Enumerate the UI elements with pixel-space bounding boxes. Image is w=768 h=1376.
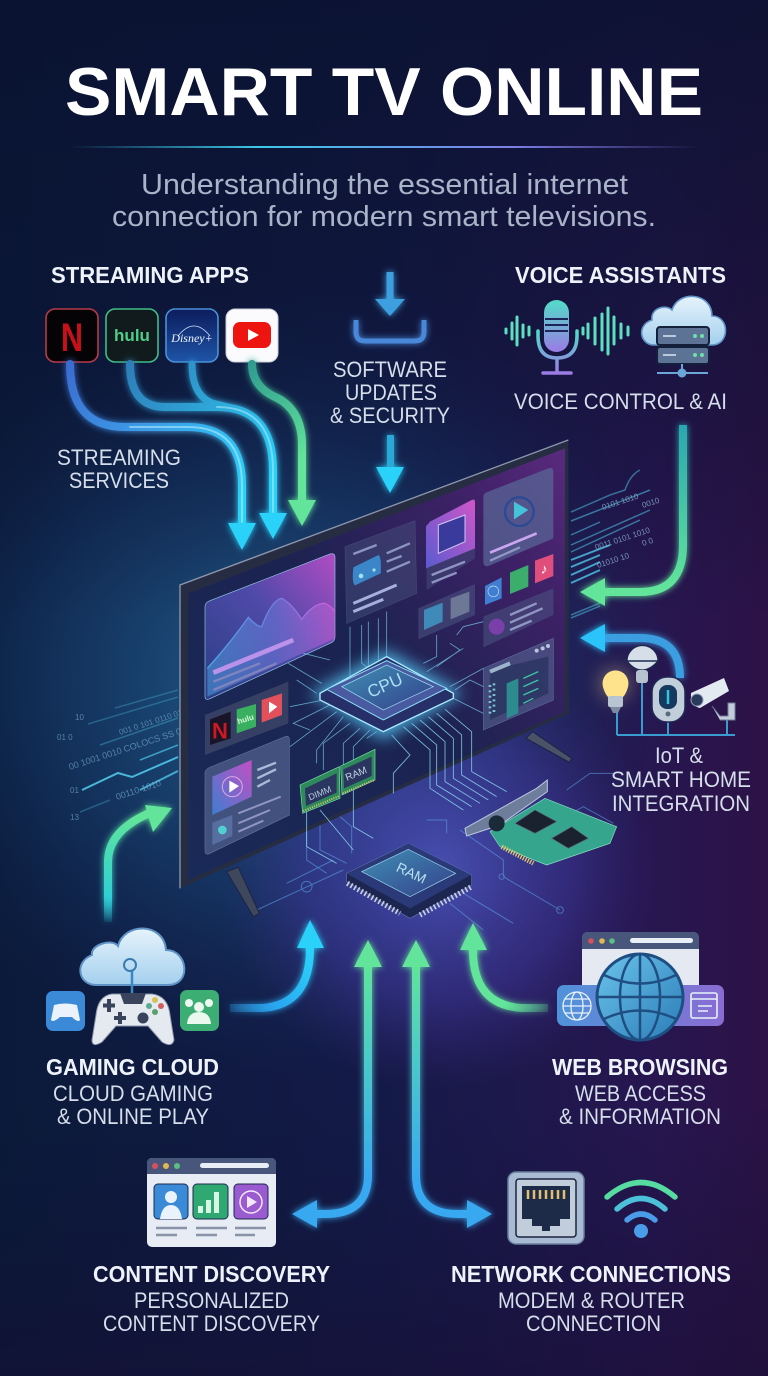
panel: info card	[345, 521, 417, 623]
panel: chart	[205, 554, 335, 699]
label: modem and router	[498, 1288, 685, 1336]
label: iot and smart home: SMART HOME	[611, 767, 751, 792]
label: personalized discovery: PERSONALIZED	[134, 1288, 289, 1313]
arrow: software	[376, 435, 404, 493]
label: web access: WEB ACCESS	[575, 1081, 706, 1106]
data streams: right: 0 0	[641, 536, 655, 548]
label: software updates and security	[330, 357, 450, 428]
icon: iot devices	[599, 646, 735, 735]
arrow: hulu and disney	[130, 364, 287, 539]
ram chip	[347, 843, 472, 918]
app tiles: ♪	[540, 560, 547, 576]
icon: ethernet port	[508, 1172, 584, 1244]
data streams: left: 00110 1010	[115, 778, 162, 802]
label: voice control and ai: VOICE CONTROL & AI	[514, 389, 727, 414]
panel: video card	[483, 468, 553, 566]
icon: hulu	[106, 309, 158, 362]
arrow: network connections	[402, 940, 492, 1228]
ram sticks: DIMM	[307, 784, 333, 802]
icon: content discovery window	[147, 1158, 276, 1247]
panel: profile	[483, 588, 553, 647]
heading: content discovery: CONTENT DISCOVERY	[93, 1261, 330, 1287]
panel: app row: N	[212, 718, 228, 743]
arrow: web to ram	[460, 923, 548, 1008]
label: software updates and security: UPDATES	[345, 380, 437, 405]
arrow: netflix	[70, 364, 256, 550]
subtitle: connection for modern smart televisions.	[112, 201, 656, 233]
panel: two tiles	[418, 584, 475, 639]
stand: left leg	[227, 867, 259, 917]
data streams: right: 01010 10	[596, 551, 631, 570]
icon: wifi	[607, 1182, 675, 1238]
data streams: left: 001 0 101 0110 0101	[118, 705, 193, 737]
heading: voice assistants: VOICE ASSISTANTS	[515, 262, 726, 288]
icon: disney plus	[166, 309, 218, 362]
icon: light bulb	[599, 668, 631, 713]
cpu chip: CPU	[364, 669, 406, 702]
icon: netflix	[46, 309, 98, 362]
icon: profile tile	[154, 1184, 188, 1219]
tv screen	[188, 448, 565, 880]
icon: play tile	[234, 1184, 268, 1219]
ram sticks	[300, 749, 375, 813]
label: cloud gaming: CLOUD GAMING	[53, 1081, 213, 1106]
label: modem and router: CONNECTION	[526, 1311, 661, 1336]
label: iot and smart home: IoT &	[655, 743, 703, 768]
label: streaming services: SERVICES	[69, 468, 169, 493]
circuit traces	[288, 612, 483, 777]
icon: cloud gaming	[46, 928, 219, 1045]
arrows: streaming apps to tv	[70, 364, 316, 550]
icon: community tile	[180, 990, 219, 1031]
ram sticks: RAM	[344, 765, 369, 784]
icon: smart speaker	[627, 646, 658, 683]
data streams: left	[57, 690, 197, 822]
label: personalized discovery	[103, 1288, 320, 1336]
label: streaming services	[57, 445, 181, 493]
icon: netflix: N	[61, 316, 83, 360]
data streams: left: 00 1001 0010 COLOCS SS 0010	[68, 721, 197, 772]
data streams: right: 0101 1010	[601, 491, 640, 512]
arrow: youtube	[252, 364, 316, 526]
label: personalized discovery: CONTENT DISCOVERY	[103, 1311, 320, 1336]
title: SMART TV ONLINE	[65, 54, 703, 130]
label: cloud gaming: & ONLINE PLAY	[57, 1104, 209, 1129]
label: iot and smart home	[611, 743, 751, 816]
network card	[465, 780, 617, 865]
data streams: left: 13	[70, 813, 79, 822]
subtitle: Understanding the essential internet	[141, 169, 628, 201]
icon: cloud	[80, 928, 184, 985]
cpu chip	[310, 650, 463, 740]
arrow: voice to tv	[580, 425, 683, 606]
icon: small window	[691, 993, 717, 1018]
data streams: left: 10	[75, 713, 84, 722]
panel: app row: hulu	[236, 712, 255, 726]
label: web access	[559, 1081, 721, 1129]
icon: disney plus: Disney+	[170, 331, 213, 345]
heading: streaming apps: STREAMING APPS	[51, 262, 249, 288]
heading: web browsing: WEB BROWSING	[552, 1054, 728, 1080]
arrow: content discovery	[292, 940, 382, 1228]
ram chip: RAM	[394, 859, 429, 887]
arrow: iot to tv	[580, 624, 680, 678]
arrow: gaming to tv	[108, 805, 172, 922]
heading: gaming cloud: GAMING CLOUD	[46, 1054, 219, 1080]
icon: small globe	[563, 992, 591, 1020]
label: web access: & INFORMATION	[559, 1104, 721, 1129]
arrow: gaming to ram	[230, 920, 324, 1008]
icon: security camera	[691, 678, 735, 720]
data streams: left: 01 0	[57, 733, 73, 742]
icon: thermostat	[652, 677, 685, 722]
icon: browser window	[582, 932, 699, 992]
label: software updates and security: SOFTWARE	[333, 357, 447, 382]
tv frame	[180, 440, 569, 888]
panel: video list	[205, 736, 289, 854]
icon: controller	[92, 993, 174, 1045]
panel: app row	[205, 682, 288, 755]
label: iot and smart home: INTEGRATION	[612, 791, 750, 816]
data streams: right: 0011 0101 1010	[594, 525, 652, 552]
traces to card and ram	[307, 709, 507, 863]
television with chips	[180, 440, 617, 930]
icon: chart tile	[193, 1184, 228, 1219]
label: cloud gaming	[53, 1081, 213, 1129]
label: streaming services: STREAMING	[57, 445, 181, 470]
icon: gamepad tile	[46, 991, 85, 1031]
icon: microphone	[506, 300, 628, 373]
icon group: streaming apps	[46, 309, 278, 362]
stand: right leg	[526, 732, 572, 762]
icon: web browser and globe	[557, 932, 724, 1040]
data streams: left: 01	[70, 786, 79, 795]
label: modem and router: MODEM & ROUTER	[498, 1288, 685, 1313]
subtitle	[112, 169, 656, 233]
panel: terminal	[483, 638, 553, 730]
app tiles	[485, 554, 553, 605]
heading: network connections: NETWORK CONNECTIONS	[451, 1261, 731, 1287]
icon: globe	[597, 954, 683, 1040]
icon: software download	[356, 272, 424, 341]
icon: cloud server	[642, 296, 726, 378]
data streams: right	[571, 470, 661, 618]
data streams: right: 0010	[641, 496, 661, 510]
floor circuit lines	[257, 773, 613, 930]
panel: media card	[426, 498, 475, 590]
icon: youtube	[226, 309, 278, 362]
label: software updates and security: & SECURITY	[330, 403, 450, 428]
icon: hulu: hulu	[114, 326, 150, 345]
icon: info band	[557, 985, 724, 1026]
